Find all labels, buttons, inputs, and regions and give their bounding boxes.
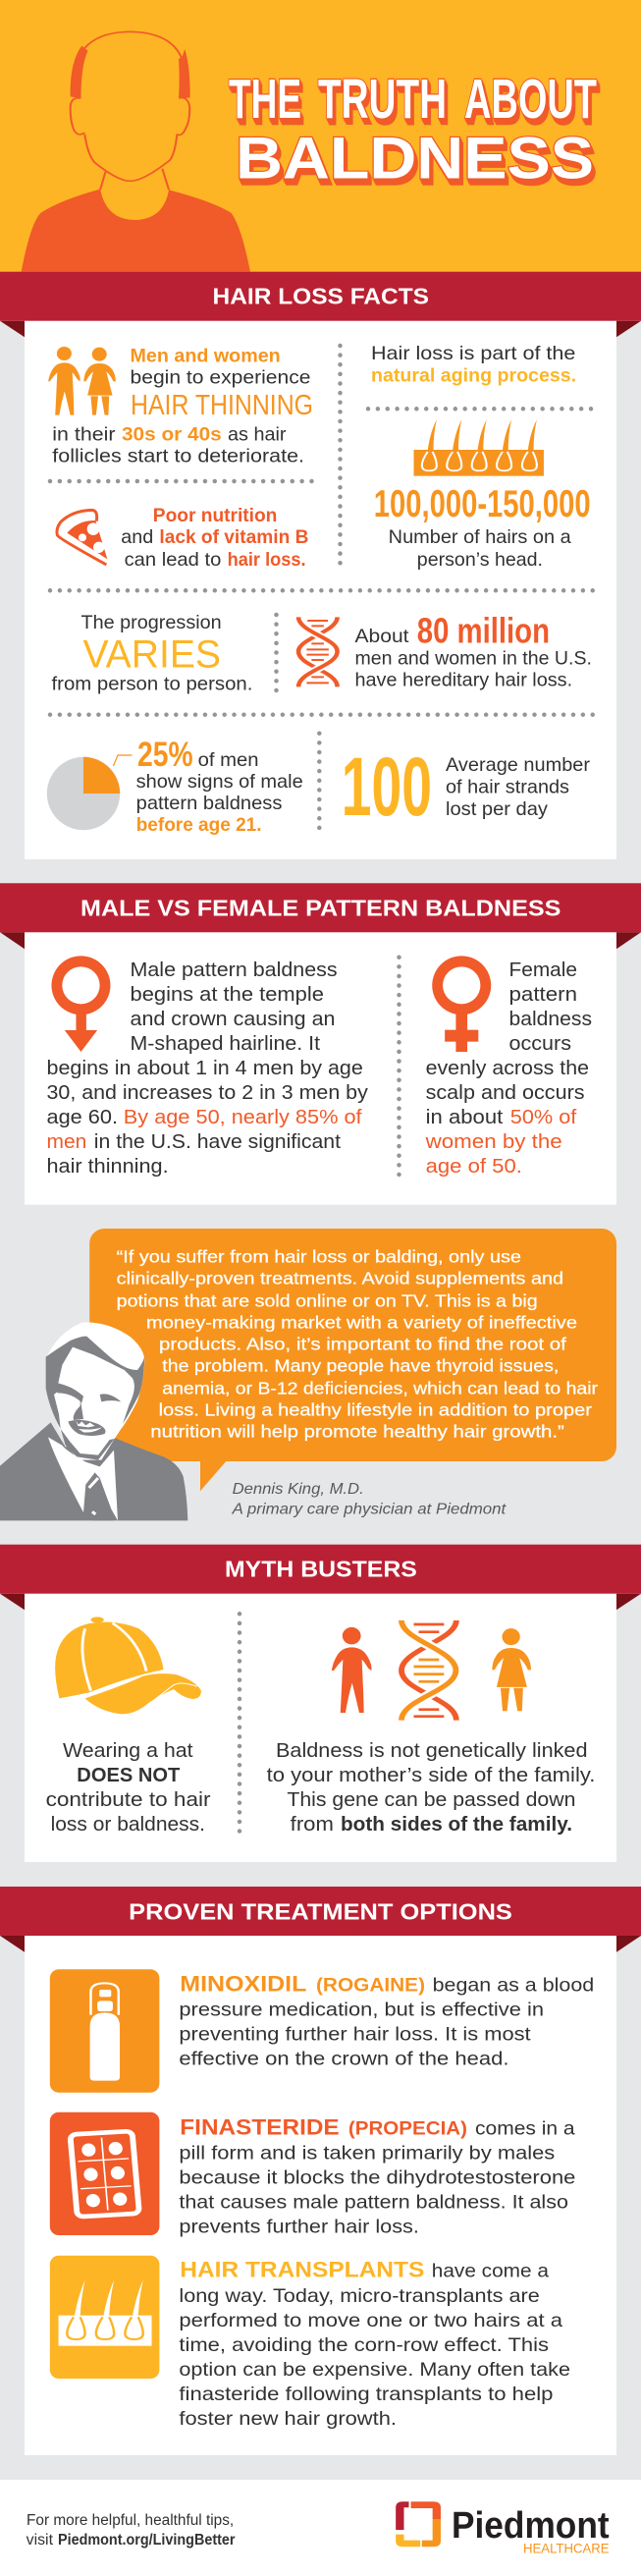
title: BALDNESS <box>236 126 594 192</box>
text: minoxidil: (ROGAINE) <box>316 1975 425 1996</box>
stat: 25 percent of men: 25% <box>137 736 193 774</box>
heading: male vs female <box>0 883 641 932</box>
text: hair transplants: time, avoiding the corn-row effect. This <box>179 2334 549 2356</box>
text: poor nutrition: lack of vitamin B <box>159 526 308 548</box>
quote text: the problem. Many people have thyroid issues, <box>162 1356 559 1376</box>
text: minoxidil: MINOXIDIL <box>180 1971 306 1996</box>
stat: 100,000-150,000 hairs: Number of hairs on a <box>389 526 571 548</box>
text: poor nutrition: hair loss. <box>228 549 306 571</box>
text: minoxidil: began as a blood <box>433 1974 594 1996</box>
stat: 80 million: have hereditary hair loss. <box>355 669 572 690</box>
text: genetics myth: both sides of the family. <box>341 1813 572 1836</box>
text: hair thinning: as hair <box>228 423 287 445</box>
text: female pattern baldness: evenly across the <box>426 1057 589 1079</box>
text: poor nutrition: Poor nutrition <box>153 505 277 526</box>
chart: 25 percent pie <box>47 755 132 830</box>
quote text: anemia, or B-12 deficiencies, which can lead to hair <box>162 1378 598 1398</box>
text: hair transplants: foster new hair growth. <box>179 2408 397 2430</box>
text: progression varies <box>51 612 252 694</box>
portrait: Dennis King <box>0 1323 187 1520</box>
text: poor nutrition: and <box>121 526 153 548</box>
text: progression varies: from person to person. <box>51 673 252 694</box>
stat: 25 percent of men: before age 21. <box>136 814 261 836</box>
text: female pattern baldness: baldness <box>508 1008 592 1030</box>
icon: hair follicles <box>413 419 544 476</box>
text: genetics myth: This gene can be passed down <box>287 1788 575 1811</box>
icon: man and woman <box>48 347 116 415</box>
icon: blister pack <box>50 2112 159 2235</box>
heading: myth busters <box>0 1545 641 1594</box>
text: male pattern baldness: in the U.S. have significant <box>94 1130 341 1153</box>
text: hat myth: DOES NOT <box>77 1764 181 1786</box>
heading: male vs female: MALE VS FEMALE PATTERN BALDNESS <box>80 896 561 921</box>
footer text: Piedmont.org/LivingBetter <box>58 2532 236 2549</box>
text: hair transplants: long way. Today, micro-transplants are <box>179 2285 540 2307</box>
text: male pattern baldness: hair thinning. <box>47 1155 169 1178</box>
illustration: bald man silhouette <box>22 31 250 272</box>
text: hair thinning: in their <box>52 423 116 445</box>
icon: baseball cap <box>55 1617 201 1714</box>
stat: 100 strands per day: Average number <box>446 754 591 776</box>
title <box>229 68 597 192</box>
text: male pattern baldness: 30, and increases to 2 in 3 men by <box>47 1081 369 1104</box>
footer text <box>27 2512 236 2549</box>
text: hair thinning <box>52 345 313 467</box>
text: minoxidil <box>179 1971 594 2070</box>
stat: 80 million: men and women in the U.S. <box>355 647 592 669</box>
text: hat myth: loss or baldness. <box>51 1813 205 1836</box>
panel: hair loss facts <box>0 272 641 859</box>
text: finasteride: (PROPECIA) <box>348 2119 467 2140</box>
quote text: clinically-proven treatments. Avoid supplements and <box>117 1269 563 1288</box>
panel: male vs female pattern baldness <box>0 883 641 1205</box>
text: female pattern baldness: 50% of <box>510 1106 577 1128</box>
quote text <box>117 1246 598 1442</box>
heading: myth busters: MYTH BUSTERS <box>225 1556 417 1581</box>
icon: hair transplant follicles <box>50 2256 159 2379</box>
panel: myth busters <box>0 1545 641 1862</box>
stat: 100,000-150,000 hairs <box>374 483 591 571</box>
logo: Piedmont Healthcare <box>396 2501 610 2555</box>
heading: proven treatment options: PROVEN TREATMENT OPTIONS <box>129 1898 512 1924</box>
stat: 80 million <box>355 610 592 690</box>
text: natural aging: natural aging process. <box>371 364 576 386</box>
stat: 100 strands per day: of hair strands <box>446 777 569 798</box>
footer <box>0 2480 641 2576</box>
text: male pattern baldness: age 60. <box>47 1106 118 1128</box>
text: hair transplants: performed to move one or two hairs at a <box>179 2310 562 2331</box>
stat: 80 million: About <box>355 626 409 647</box>
icon: male symbol <box>51 956 110 1052</box>
stat: 100 strands per day: 100 <box>342 740 432 833</box>
heading: hair loss facts: HAIR LOSS FACTS <box>212 283 429 308</box>
text: finasteride: that causes male pattern baldness. It also <box>179 2192 568 2214</box>
text: progression varies: The progression <box>80 612 222 633</box>
stat: 25 percent of men: of men <box>198 749 259 771</box>
icon: man, dna and woman <box>332 1620 531 1721</box>
text: poor nutrition: can lead to <box>125 549 221 571</box>
text: female pattern baldness: occurs <box>508 1032 571 1055</box>
text: finasteride: pill form and is taken primarily by males <box>179 2143 555 2165</box>
text: hair thinning: Men and women <box>130 345 281 366</box>
text: male pattern baldness: men <box>47 1130 86 1153</box>
attribution: Dennis King, M.D. <box>233 1481 364 1498</box>
title: TRUTH <box>318 68 447 131</box>
text: minoxidil: pressure medication, but is effective in <box>179 2000 544 2021</box>
text: natural aging: Hair loss is part of the <box>371 343 575 364</box>
icon: pizza slice <box>57 510 107 565</box>
stat: 100 strands per day: lost per day <box>446 798 548 820</box>
logo: Piedmont Healthcare: HEALTHCARE <box>523 2540 610 2555</box>
text: finasteride: comes in a <box>475 2118 575 2140</box>
text: hair transplants: finasteride following transplants to help <box>179 2384 554 2405</box>
icon: dna helix <box>298 617 338 686</box>
text: female pattern baldness: women by the <box>425 1130 562 1153</box>
text: poor nutrition <box>121 505 308 571</box>
speech bubble <box>89 1229 616 1491</box>
text: female pattern baldness: pattern <box>508 983 577 1006</box>
text: genetics myth <box>267 1739 595 1836</box>
text: minoxidil: effective on the crown of the head. <box>179 2049 508 2070</box>
text: hair thinning: HAIR THINNING <box>131 390 313 421</box>
footer text: For more helpful, healthful tips, <box>27 2512 234 2529</box>
stat: 25 percent of men: show signs of male <box>136 771 303 793</box>
text: female pattern baldness: Female <box>508 959 577 981</box>
heading: hair loss facts <box>0 272 641 321</box>
panel: proven treatment options <box>0 1887 641 2455</box>
text: male pattern baldness: By age 50, nearly 85% of <box>124 1106 362 1128</box>
text: male pattern baldness: Male pattern baldness <box>130 959 338 981</box>
text: finasteride: FINASTERIDE <box>180 2115 340 2140</box>
attribution <box>232 1481 507 1518</box>
text: male pattern baldness <box>47 959 369 1178</box>
text: male pattern baldness: begins in about 1 in 4 men by age <box>47 1057 363 1079</box>
text: hat myth: Wearing a hat <box>63 1739 193 1762</box>
text: hair transplants <box>179 2258 570 2430</box>
stat: 25 percent of men: pattern baldness <box>136 793 283 814</box>
quote text: money-making market with a variety of ineffective <box>146 1313 577 1333</box>
text: female pattern baldness: in about <box>426 1106 504 1128</box>
text: genetics myth: to your mother’s side of the family. <box>267 1764 595 1786</box>
text: finasteride <box>179 2115 575 2238</box>
text: progression varies: VARIES <box>82 632 221 676</box>
quote text: loss. Living a healthy lifestyle in addition to proper <box>159 1399 592 1419</box>
text: male pattern baldness: M-shaped hairline. It <box>130 1032 320 1055</box>
text: female pattern baldness: age of 50. <box>426 1155 522 1178</box>
text: finasteride: prevents further hair loss. <box>179 2217 419 2238</box>
text: male pattern baldness: begins at the temple <box>130 983 324 1006</box>
text: genetics myth: from <box>291 1813 334 1836</box>
footer text: visit <box>27 2532 54 2549</box>
text: finasteride: because it blocks the dihydrotestosterone <box>179 2167 575 2189</box>
icon: female symbol <box>432 956 491 1052</box>
quote text: nutrition will help promote healthy hair growth.” <box>150 1422 564 1442</box>
text: hair thinning: follicles start to deteriorate. <box>52 446 304 467</box>
text: hair thinning: begin to experience <box>130 367 310 389</box>
text: male pattern baldness: and crown causing an <box>130 1008 336 1030</box>
title: THE <box>229 68 301 131</box>
text: hair thinning: 30s or 40s <box>122 423 222 445</box>
text: minoxidil: preventing further hair loss. It is most <box>179 2024 531 2046</box>
quote text: “If you suffer from hair loss or balding, only use <box>117 1246 521 1266</box>
quote text: products. Also, it’s important to find the root of <box>159 1335 566 1354</box>
text: hat myth <box>46 1739 211 1836</box>
stat: 80 million: 80 million <box>417 610 550 650</box>
logo: Piedmont Healthcare: Piedmont <box>452 2505 610 2547</box>
text: hair transplants: have come a <box>432 2261 549 2282</box>
callout: doctor quote <box>0 1229 616 1520</box>
text: female pattern baldness: scalp and occurs <box>426 1081 585 1104</box>
text: female pattern baldness <box>425 959 592 1178</box>
quote text: potions that are sold online or on TV. This is a big <box>117 1290 538 1310</box>
heading: proven treatment options <box>0 1887 641 1936</box>
icon: spray bottle <box>50 1969 159 2093</box>
text: natural aging <box>371 343 576 386</box>
text: hat myth: contribute to hair <box>46 1788 211 1811</box>
stat: 25 percent of men <box>136 736 303 836</box>
text: hair transplants: option can be expensive. Many often take <box>179 2359 570 2381</box>
attribution: A primary care physician at Piedmont <box>232 1502 507 1518</box>
stat: 100,000-150,000 hairs: person’s head. <box>417 549 543 571</box>
stat: 100 strands per day <box>342 740 591 833</box>
text: genetics myth: Baldness is not genetically linked <box>276 1739 587 1762</box>
text: hair transplants: HAIR TRANSPLANTS <box>180 2258 424 2282</box>
header: title and bald man <box>0 0 641 272</box>
